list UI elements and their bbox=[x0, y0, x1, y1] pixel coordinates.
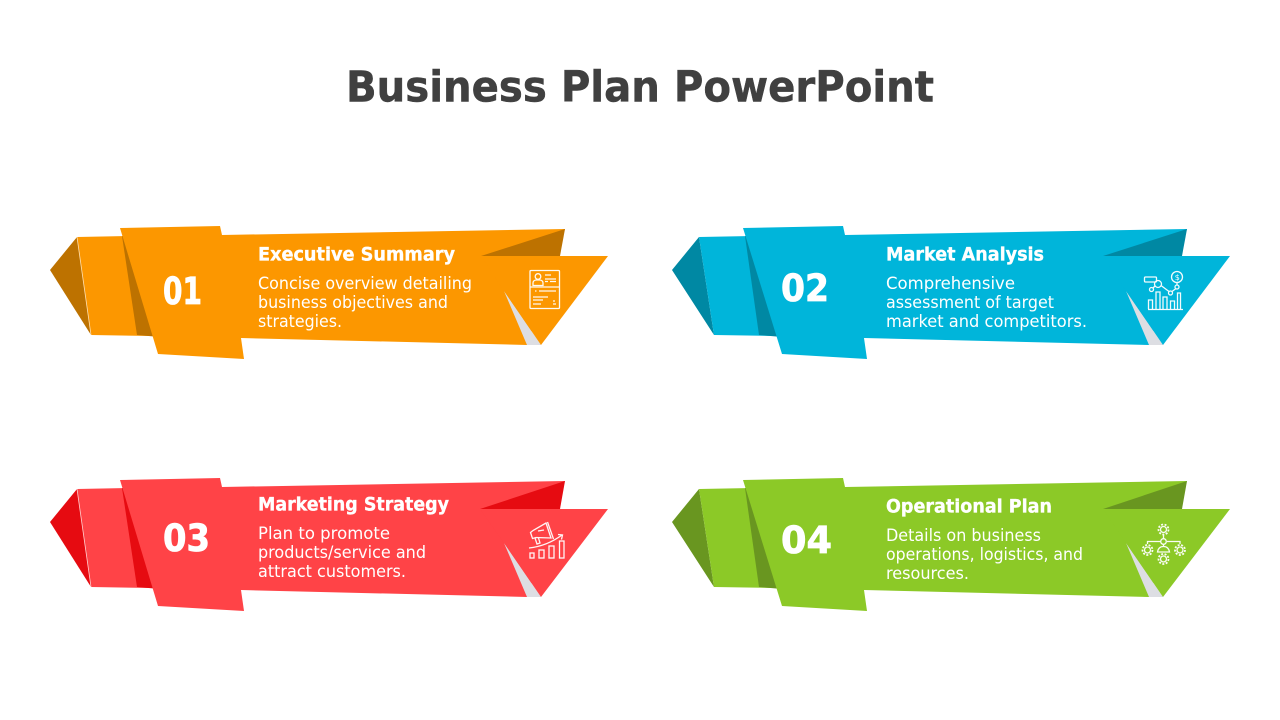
heading: executive summary: Executive Summary bbox=[258, 243, 456, 265]
text block: executive summary: Concise overview detailing bbox=[258, 274, 472, 293]
icon: market chart bbox=[1144, 272, 1183, 310]
heading: market analysis: Market Analysis bbox=[886, 243, 1044, 265]
number 01: 01 bbox=[163, 270, 202, 313]
text block: marketing strategy: attract customers. bbox=[258, 562, 406, 581]
text block: executive summary bbox=[258, 274, 472, 331]
text block: operational plan: Details on business bbox=[886, 526, 1041, 545]
heading: marketing strategy: Marketing Strategy bbox=[258, 493, 450, 515]
number 04: 04 bbox=[781, 519, 832, 562]
text block: marketing strategy: products/service and bbox=[258, 543, 426, 562]
text block: marketing strategy bbox=[258, 524, 426, 581]
panel: executive summary bbox=[50, 226, 608, 359]
ribbon shape: red bbox=[50, 478, 608, 611]
number 02: 02 bbox=[781, 267, 829, 310]
panel: operational plan bbox=[672, 478, 1230, 611]
title: Business Plan PowerPoint bbox=[346, 62, 934, 112]
text block: operational plan: operations, logistics, and bbox=[886, 545, 1083, 564]
ribbon shape: orange bbox=[50, 226, 608, 359]
icon: profile document bbox=[530, 270, 560, 308]
heading: operational plan: Operational Plan bbox=[886, 495, 1052, 517]
text block: market analysis bbox=[886, 274, 1087, 331]
panel: marketing strategy bbox=[50, 478, 608, 611]
panel: market analysis bbox=[672, 226, 1230, 359]
text block: market analysis: assessment of target bbox=[886, 293, 1054, 312]
text block: operational plan bbox=[886, 526, 1083, 583]
text block: market analysis: market and competitors. bbox=[886, 312, 1087, 331]
ribbon shape: green bbox=[672, 478, 1230, 611]
icon: market chart: $ bbox=[1175, 273, 1180, 282]
icon: operations flow gears bbox=[1142, 524, 1185, 564]
ribbon shape: blue bbox=[672, 226, 1230, 359]
text block: executive summary: business objectives and bbox=[258, 293, 448, 312]
number 03: 03 bbox=[163, 517, 210, 560]
text block: market analysis: Comprehensive bbox=[886, 274, 1015, 293]
text block: marketing strategy: Plan to promote bbox=[258, 524, 390, 543]
icon: megaphone and growth bars bbox=[529, 522, 564, 558]
text block: executive summary: strategies. bbox=[258, 312, 342, 331]
text block: operational plan: resources. bbox=[886, 564, 969, 583]
